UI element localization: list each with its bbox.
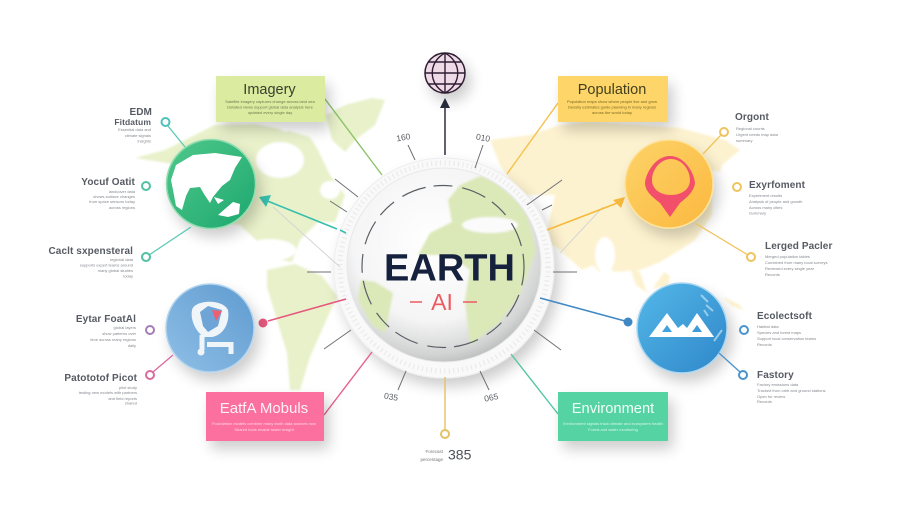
callout: bottom figure: Forecast — [425, 449, 444, 454]
callout text: Species and forest maps — [757, 330, 801, 335]
callout text: many global studies — [98, 268, 133, 273]
callout: Exyrfoment: Exyrfoment — [749, 180, 806, 191]
callout: Orgont — [735, 112, 779, 143]
scale labels: 035 — [383, 391, 399, 403]
connector: modules — [324, 352, 372, 415]
environment text: Environment signals track climate and ecosystem health — [563, 421, 663, 426]
callout text: Across many cities — [749, 205, 782, 210]
heading: EARTH: EARTH — [384, 248, 515, 290]
callout text: supports expert teams around — [80, 262, 133, 268]
callout: Ecolectsoft: Ecolectsoft — [757, 311, 813, 322]
callout text: pilot study — [119, 385, 137, 390]
callout text: climate signals — [125, 133, 151, 138]
globe outer dotted ring — [334, 158, 554, 378]
modules text: Shared tools enable faster insight — [234, 427, 295, 432]
callout text: Experiment results — [749, 193, 782, 198]
callout: bottom figure: percentage — [420, 457, 443, 462]
node: Fastory — [719, 353, 747, 379]
panel: imagery — [216, 76, 325, 122]
sphere continents — [358, 172, 536, 345]
callout: Fastory — [757, 370, 826, 404]
callout: bottom figure — [420, 446, 472, 462]
callout: Exyrfoment — [749, 180, 806, 216]
callout: Lerged Pacler: Lerged Pacler — [765, 241, 832, 252]
arrow: yellow to orange circle — [547, 197, 625, 230]
callout: Orgont: Orgont — [735, 112, 769, 123]
callout text: landcover data — [109, 189, 136, 194]
callout: Ecolectsoft — [757, 311, 816, 347]
callout: Caclt sxpensteral: Caclt sxpensteral — [48, 246, 133, 257]
decoration: coast detail — [701, 295, 722, 341]
callout: bottom figure: 385 — [448, 446, 472, 462]
callout text: from space sensors today — [89, 199, 135, 204]
callout text: insights — [137, 138, 151, 144]
node: Exyrfoment — [733, 183, 741, 191]
connector: bottom node — [441, 377, 449, 438]
icon: continents — [171, 153, 242, 217]
callout text: Factory emissions data — [757, 382, 799, 387]
callout: EDM: EDM — [129, 107, 152, 118]
node: Eytar FoatAl — [146, 326, 154, 334]
connector: imagery — [325, 99, 382, 175]
callout text: today — [123, 274, 133, 278]
callout text — [90, 325, 137, 348]
imagery text: Satellite imagery captures change across land sea — [225, 99, 315, 104]
callout text: global layers — [114, 325, 136, 330]
environment text: Forest and water monitoring — [588, 427, 638, 432]
modules text — [212, 421, 316, 432]
callout: Eytar FoatAl — [76, 314, 137, 348]
callout text — [118, 127, 151, 144]
connector: environment — [511, 354, 558, 414]
callout: Eytar FoatAl: Eytar FoatAl — [76, 314, 136, 325]
callout text — [757, 324, 816, 347]
callout text — [757, 382, 826, 404]
circle: blue mountains — [637, 283, 727, 373]
scale ticks — [307, 145, 577, 390]
callout text: Records — [757, 342, 772, 347]
environment title: Environment — [572, 401, 654, 417]
arrow: pink to blue circle — [258, 299, 346, 328]
arrow: blue to blue circle — [540, 298, 632, 326]
panel: environment — [558, 392, 668, 441]
scale labels: 065 — [483, 391, 499, 404]
title globe — [334, 158, 554, 378]
panel: earth modules — [206, 392, 324, 441]
callout text: Analysis of people and growth — [749, 199, 802, 204]
callout text: across regions — [109, 205, 135, 210]
node: Lerged Pacler — [695, 223, 755, 261]
callout: EDM — [114, 107, 152, 144]
callout text: Regional counts — [736, 126, 765, 131]
arrow: teal to green circle — [259, 195, 346, 233]
circle: yellow pin — [625, 140, 713, 228]
circle: green map — [166, 140, 256, 228]
callout text: shows surface changes — [93, 194, 135, 199]
callout: EDM: Fitdatum — [114, 117, 151, 127]
callout: Fastory: Fastory — [757, 370, 794, 381]
callout text: testing new models with partners — [79, 390, 137, 395]
world map: green Americas — [135, 98, 385, 390]
sphere — [347, 168, 541, 362]
callout text: regional data — [110, 257, 134, 262]
callout: Yocuf Oatit: Yocuf Oatit — [81, 177, 136, 188]
callout text: Support local conservation teams — [757, 336, 816, 341]
node: Orgont — [703, 128, 728, 154]
callout: Caclt sxpensteral — [48, 246, 134, 278]
callout text: time across many regions — [90, 337, 136, 342]
imagery text — [225, 99, 315, 115]
callout text — [765, 254, 827, 277]
node: EDM — [162, 118, 185, 147]
node: Ecolectsoft — [740, 326, 748, 334]
imagery text: updated every single day — [248, 110, 292, 115]
scale labels — [383, 131, 499, 404]
icon: globe on stand — [192, 302, 231, 356]
thin grey connectors — [273, 207, 603, 267]
callout text: daily — [128, 343, 136, 348]
callout text: Merged population tables — [765, 254, 810, 259]
callout text: Records — [765, 272, 780, 277]
callout: Patototof Picot — [64, 373, 138, 406]
population text: across the world today — [592, 110, 632, 115]
subheading: AI: AI — [431, 289, 453, 315]
world map: yellow Eurasia — [490, 122, 743, 310]
callout text: summary — [736, 138, 752, 143]
population text — [567, 99, 657, 115]
callout text: Reviewed every single year — [765, 266, 815, 271]
callout text — [79, 385, 137, 406]
icon: map pin — [645, 156, 695, 217]
callout text: Open for review — [757, 394, 785, 399]
modules text: Foundation models combine many earth data sources now — [212, 421, 316, 426]
callout text: Combined from many local surveys — [765, 260, 827, 265]
callout: Patototof Picot: Patototof Picot — [64, 373, 138, 384]
panel: population — [558, 76, 668, 122]
connector: population — [507, 103, 558, 174]
callout text — [89, 189, 136, 210]
callout text — [749, 193, 802, 216]
callout text: Essential data and — [118, 127, 151, 132]
dashed ring — [362, 186, 524, 348]
callout text: Records — [757, 399, 772, 404]
icon: wire globe — [425, 53, 465, 93]
callout text: Summary — [749, 210, 766, 216]
node: Caclt sxpensteral — [142, 227, 191, 261]
callout text: Tracked from orbit and ground stations — [757, 388, 826, 393]
scale labels: 010 — [475, 132, 491, 144]
population title: Population — [578, 82, 646, 98]
population text: Population maps show where people live and grow — [567, 99, 657, 104]
arrow: up to globe icon — [440, 98, 450, 155]
scale labels: 160 — [395, 131, 411, 143]
imagery text: Detailed views support global data analysis here — [227, 104, 314, 110]
modules title: EatfA Mobuls — [220, 400, 308, 417]
callout text — [736, 126, 779, 143]
callout text — [80, 257, 134, 278]
callout text: and field reports — [108, 396, 137, 401]
circle: blue head — [166, 284, 254, 372]
callout: Lerged Pacler — [765, 241, 832, 277]
population text: Density estimates guide planning in many regions — [568, 104, 656, 110]
node: Patototof Picot — [146, 355, 173, 379]
callout text: Urgent needs map data — [736, 132, 779, 137]
callout text: Habitat data — [757, 324, 779, 329]
callout text: shared — [125, 400, 137, 406]
icon: mountains — [649, 313, 714, 337]
imagery title: Imagery — [243, 82, 296, 98]
callout: Yocuf Oatit — [81, 177, 136, 210]
callout text: show patterns over — [102, 331, 137, 336]
environment text — [563, 421, 663, 432]
node: Yocuf Oatit — [142, 182, 150, 190]
subheading: AI — [410, 289, 477, 315]
